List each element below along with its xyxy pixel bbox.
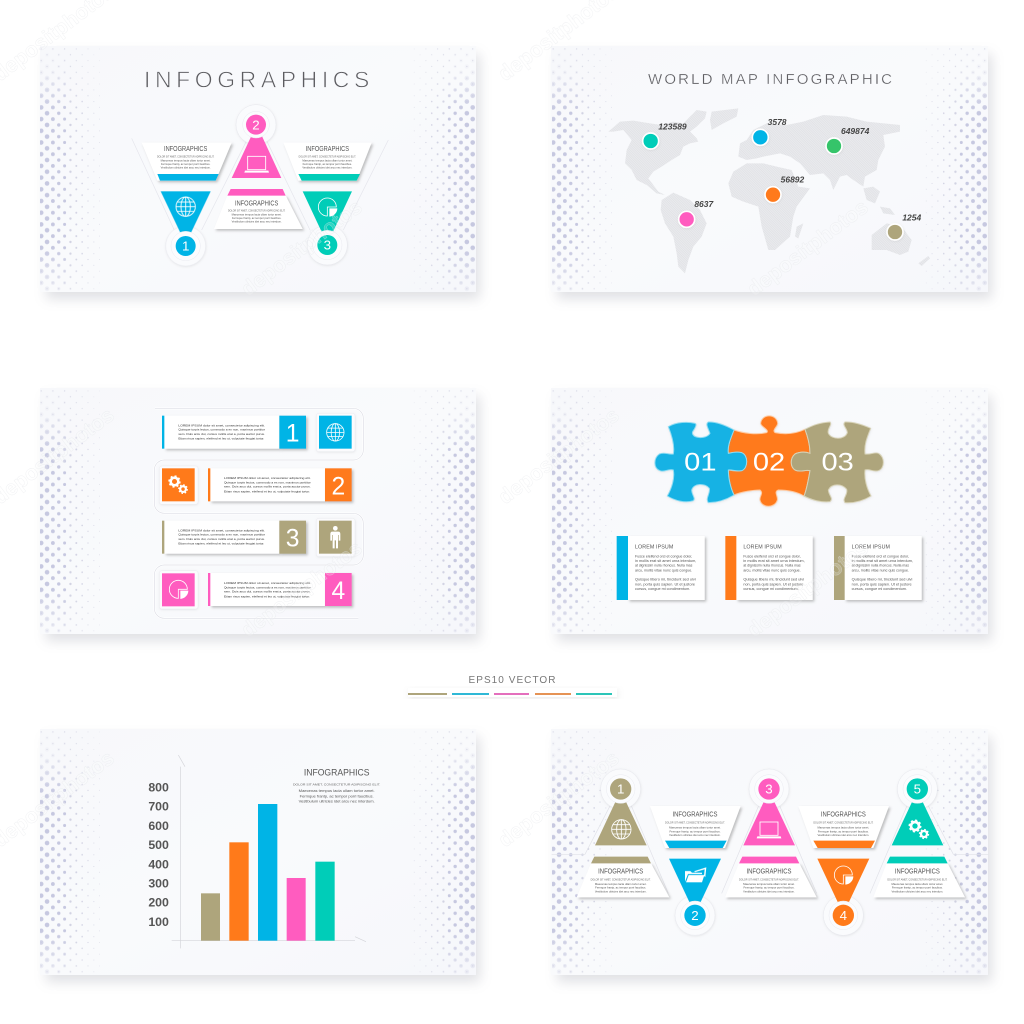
card 1: LOREM IPSUM: [635, 544, 673, 550]
card 2: in mollis erat sit amet urna interdum,: [743, 559, 805, 563]
step 2 card: Fermque frantp, ac tempor porri faucibus.: [232, 216, 282, 220]
row 2: Quisque turpis lectus, commodo a ex non, maximus porttitor: [224, 480, 311, 484]
triangle 3 with laptop: [743, 791, 795, 845]
footer label: eps10 vector: [408, 675, 617, 697]
chart caption: DOLOR SIT AMET, CONSECTETUR ADIPISCING ELIT.: [293, 782, 381, 786]
panel: five step triangles: [551, 729, 992, 982]
puzzle piece 02: 02: [753, 449, 785, 477]
badge 5: 5: [914, 782, 921, 797]
badge 1: 1: [182, 239, 189, 254]
badge 4: 4: [840, 908, 848, 923]
step 2 card: [214, 189, 303, 229]
row 1: [162, 416, 306, 449]
world map: [608, 108, 930, 273]
step 3 text card: Maecenas tempus lacia ullam tortor amet.: [743, 882, 795, 886]
badge 1: [171, 231, 200, 261]
icon tile: pie: [159, 571, 198, 609]
chart caption: Maecenas tempus lacia ullam tortor amet.: [299, 789, 375, 793]
row 1: Quisque turpis lectus, commodo a ex non, maximus porttitor: [178, 428, 265, 432]
step 3 card: Maecenas tempus lacia ullam tortor amet.: [302, 159, 353, 163]
step 2 text card: Vestibulum ultricies idet arcu nec interdum.: [669, 833, 721, 837]
puzzle piece 02: [728, 416, 810, 506]
puzzle piece 01: [655, 422, 747, 503]
card 3: [834, 536, 922, 600]
step 3 text card: Vestibulum ultricies idet arcu nec interdum.: [743, 889, 795, 893]
step 3 card: Vestibulum ultricies idet arcu nec interdum.: [302, 166, 353, 170]
triangle 1 with globe: [595, 791, 647, 845]
row 3: LOREM IPSUM dolor sit amet, consectetur adipiscing elit.: [178, 528, 265, 532]
step 2 text card: [650, 806, 741, 848]
step 4 text card: Vestibulum ultricies idet arcu nec interdum.: [817, 833, 869, 837]
icon tile: person: [316, 518, 355, 557]
pin: 3578: [752, 117, 787, 145]
card 2: non, porta quis sapien. Ut et justore: [743, 582, 803, 586]
step 3 card: INFOGRAPHICS: [306, 144, 349, 153]
panel: puzzle: [551, 388, 992, 641]
step 1 text card: DOLOR SIT AMET, CONSECTETUR ADIPISCING ELIT.: [591, 877, 651, 881]
row 2: LOREM IPSUM dolor sit amet, consectetur adipiscing elit.: [224, 476, 311, 480]
badge 3: 3: [765, 782, 773, 797]
step 4 text card: Fermque frantp, ac tempor porri faucibus.: [818, 829, 869, 833]
card 2: cursus, congue mi condimentum.: [743, 587, 799, 591]
badge 3: [313, 230, 342, 260]
step 2 card: Vestibulum ultricies idet arcu nec interdum.: [232, 220, 282, 224]
step 1 text card: Vestibulum ultricies idet arcu nec interdum.: [595, 889, 647, 893]
chart caption: [293, 767, 381, 804]
pin: 123589: [643, 121, 687, 149]
card 3: arcu, mollis vitae nunc quis congue.: [852, 568, 909, 572]
step 4 text card: INFOGRAPHICS: [821, 810, 866, 819]
row 1: sem. Duis arcu dui, cursus mollis erat a, porta auctor purus.: [178, 432, 265, 436]
row 4: 4: [331, 578, 345, 605]
step 3 card: [283, 143, 372, 181]
row 1: LOREM IPSUM dolor sit amet, consectetur adipiscing elit.: [178, 423, 265, 427]
y axis labels: [148, 781, 169, 929]
row 4: LOREM IPSUM dolor sit amet, consectetur adipiscing elit.: [224, 581, 311, 585]
step 5 text card: Fermque frantp, ac tempor porri faucibus.: [892, 886, 943, 890]
stock watermarks: [0, 0, 873, 852]
row 4: Etiam risus sapien, eleifend et leo ut, vulputate feugiat tortor.: [224, 594, 310, 598]
badge 2: [681, 901, 709, 930]
step 4 text card: [798, 806, 889, 848]
triangle 1 with globe: [161, 191, 211, 244]
panel: world map: [551, 46, 992, 299]
step 3 card: Fermque frantp, ac tempor porri faucibus.: [303, 162, 352, 166]
stock watermarks: depositphotos: [494, 404, 624, 509]
icon tile: gears: [159, 466, 198, 504]
card 1: arcu, mollis vitae nunc quis congue.: [635, 568, 692, 572]
card 2: Fusce eleifend orci et congue dolor,: [743, 554, 801, 558]
y axis labels: 200: [148, 896, 169, 910]
card 3: cursus, congue mi condimentum.: [852, 587, 907, 591]
badge 3: [755, 775, 783, 803]
card 3: LOREM IPSUM: [852, 544, 890, 550]
y axis labels: 700: [148, 800, 169, 814]
row 1: 1: [286, 421, 300, 448]
panel: triangles with three steps: [40, 46, 480, 299]
icon tile: globe: [316, 413, 355, 452]
puzzle piece 03: [791, 422, 883, 503]
step 2 text card: Maecenas tempus lacia ullam tortor amet.: [669, 826, 721, 830]
stock watermarks: depositphotos: [237, 196, 367, 301]
stock watermarks: depositphotos: [743, 537, 873, 642]
panel: bar chart: [40, 729, 480, 982]
card 1: Quisque libero mi, tincidunt sed ulvi: [635, 578, 696, 582]
y axis labels: 600: [148, 819, 169, 833]
step 3 text card: Fermque frantp, ac tempor porri faucibus.: [743, 886, 795, 890]
triangle 3 with pie: [303, 191, 352, 244]
title: world map infographic: WORLD MAP INFOGRAPHIC: [648, 71, 892, 88]
card 3: at dignissim nulla rhoncus. Nulla mas: [852, 564, 909, 568]
step 3 card: DOLOR SIT AMET, CONSECTETUR ADIPISCING ELIT.: [299, 154, 356, 158]
step 4 text card: DOLOR SIT AMET, CONSECTETUR ADIPISCING ELIT.: [813, 821, 874, 825]
card 3: in mollis erat sit amet urna interdum,: [852, 559, 913, 563]
card 1: [617, 536, 705, 600]
triangle 2 with laptop: [232, 125, 281, 178]
step 5 text card: Maecenas tempus lacia ullam tortor amet.: [891, 882, 943, 886]
pin: 3578: 3578: [768, 117, 787, 127]
row 2: Etiam risus sapien, eleifend et leo ut, vulputate feugiat tortor.: [224, 489, 310, 493]
step 5 text card: [873, 857, 965, 897]
title: infographics: INFOGRAPHICS: [144, 66, 369, 92]
stock watermarks: depositphotos: [237, 537, 367, 642]
card 2: arcu, mollis vitae nunc quis congue.: [743, 568, 801, 572]
bars: [201, 804, 335, 941]
step 1 text card: Fermque frantp, ac tempor porri faucibus.: [595, 886, 646, 890]
chart caption: Vestibulum ultricies idet arcu nec interdum.: [299, 800, 375, 804]
badge 4: [829, 901, 858, 930]
badge 1: 1: [617, 782, 624, 797]
pin: 649874: [826, 126, 870, 154]
step 1 text card: Maecenas tempus lacia ullam tortor amet.: [595, 882, 647, 886]
puzzle piece 01: 01: [684, 449, 716, 477]
step 3 text card: DOLOR SIT AMET, CONSECTETUR ADIPISCING ELIT.: [739, 877, 799, 881]
chart caption: Fermque frantp, ac tempor porri faucibus.: [300, 794, 374, 798]
badge 1: [606, 775, 635, 803]
card 1: Fusce eleifend orci et congue dolor,: [635, 554, 692, 558]
step 1 card: INFOGRAPHICS: [164, 144, 207, 153]
badge 2: 2: [252, 117, 260, 132]
y axis labels: 100: [148, 915, 169, 929]
card 2: at dignissim nulla rhoncus. Nulla mas: [743, 564, 801, 568]
card 1: in mollis erat sit amet urna interdum,: [635, 559, 696, 563]
pin: 1254: 1254: [902, 212, 921, 222]
step 2 card: Maecenas tempus lacia ullam tortor amet.: [232, 213, 282, 217]
y axis labels: 500: [148, 838, 169, 852]
y axis labels: 300: [148, 876, 169, 890]
step 1 card: Fermque frantp, ac tempor porri faucibus.: [161, 162, 211, 166]
step 2 card: INFOGRAPHICS: [235, 198, 278, 207]
step 2 text card: INFOGRAPHICS: [672, 810, 718, 819]
row 3: Etiam risus sapien, eleifend et leo ut, vulputate feugiat tortor.: [178, 542, 265, 546]
row 3: 3: [286, 526, 300, 553]
pin: 56892: [765, 174, 805, 203]
row 4: sem. Duis arcu dui, cursus mollis erat a, porta auctor purus.: [224, 590, 311, 594]
card 3: Fusce eleifend orci et congue dolor,: [852, 554, 909, 558]
step 1 card: Vestibulum ultricies idet arcu nec interdum.: [161, 166, 211, 170]
chart caption: INFOGRAPHICS: [304, 767, 369, 777]
panel: numbered list: [40, 388, 480, 641]
row 3: Quisque turpis lectus, commodo a ex non, maximus porttitor: [178, 533, 265, 537]
step 5 text card: DOLOR SIT AMET, CONSECTETUR ADIPISCING ELIT.: [887, 877, 948, 881]
row 2: 2: [331, 473, 345, 500]
stock watermarks: depositphotos: [743, 196, 873, 301]
step 4 text card: Maecenas tempus lacia ullam tortor amet.: [817, 826, 869, 830]
card 1: cursus, congue mi condimentum.: [635, 587, 690, 591]
pin: 56892: 56892: [781, 174, 805, 184]
card 3: non, porta quis sapien. Ut et justore: [852, 582, 912, 586]
badge 5: [903, 775, 932, 803]
footer label: eps10 vector: EPS10 VECTOR: [468, 675, 556, 686]
step 2 card: DOLOR SIT AMET, CONSECTETUR ADIPISCING ELIT.: [228, 209, 286, 213]
row 2: [208, 468, 352, 501]
card 1: non, porta quis sapien. Ut et justore: [635, 582, 695, 586]
step 2 text card: Fermque frantp, ac tempor porri faucibus.: [669, 829, 721, 833]
card 2: [725, 536, 813, 600]
card 2: LOREM IPSUM: [743, 544, 782, 550]
step 1 card: [142, 143, 232, 181]
step 1 text card: INFOGRAPHICS: [598, 866, 643, 875]
badge 3: 3: [324, 238, 331, 253]
row 2: sem. Duis arcu dui, cursus mollis erat a, porta auctor purus.: [224, 485, 311, 489]
step 1 card: DOLOR SIT AMET, CONSECTETUR ADIPISCING ELIT.: [157, 154, 215, 158]
pin: 1254: [887, 212, 921, 240]
step 1 card: Maecenas tempus lacia ullam tortor amet.: [161, 159, 211, 163]
chart axes: [172, 755, 366, 948]
y axis labels: 400: [148, 857, 169, 871]
step 5 text card: INFOGRAPHICS: [895, 866, 940, 875]
row 4: Quisque turpis lectus, commodo a ex non, maximus porttitor: [224, 585, 311, 589]
stock watermarks: depositphotos: [494, 747, 624, 852]
pin: 8637: [679, 199, 714, 227]
badge 2: 2: [691, 908, 699, 923]
pin: 8637: 8637: [694, 199, 714, 209]
triangle 4 with pie: [817, 859, 869, 914]
step 5 text card: Vestibulum ultricies idet arcu nec interdum.: [891, 889, 943, 893]
puzzle piece 03: 03: [821, 449, 854, 477]
row 3: sem. Duis arcu dui, cursus mollis erat a, porta auctor purus.: [178, 537, 265, 541]
row 1: Etiam risus sapien, eleifend et leo ut, vulputate feugiat tortor.: [178, 437, 265, 441]
card 3: Quisque libero mi, tincidunt sed ulvi: [852, 578, 913, 582]
y axis labels: 800: [148, 781, 169, 795]
step 2 text card: DOLOR SIT AMET, CONSECTETUR ADIPISCING ELIT.: [665, 821, 725, 825]
row 4: [208, 573, 352, 606]
badge 2: [243, 111, 269, 138]
pin: 649874: 649874: [841, 126, 870, 136]
pin: 123589: 123589: [658, 121, 687, 131]
card 1: at dignissim nulla rhoncus. Nulla mas: [635, 564, 693, 568]
step 1 text card: [577, 857, 669, 897]
step 3 text card: [725, 857, 817, 897]
triangle 2 with folder: [669, 859, 721, 914]
triangle 5 with gears: [892, 791, 943, 845]
card 2: Quisque libero mi, tincidunt sed ulvi: [743, 578, 804, 582]
step 3 text card: INFOGRAPHICS: [746, 866, 792, 875]
row 3: [162, 521, 306, 554]
